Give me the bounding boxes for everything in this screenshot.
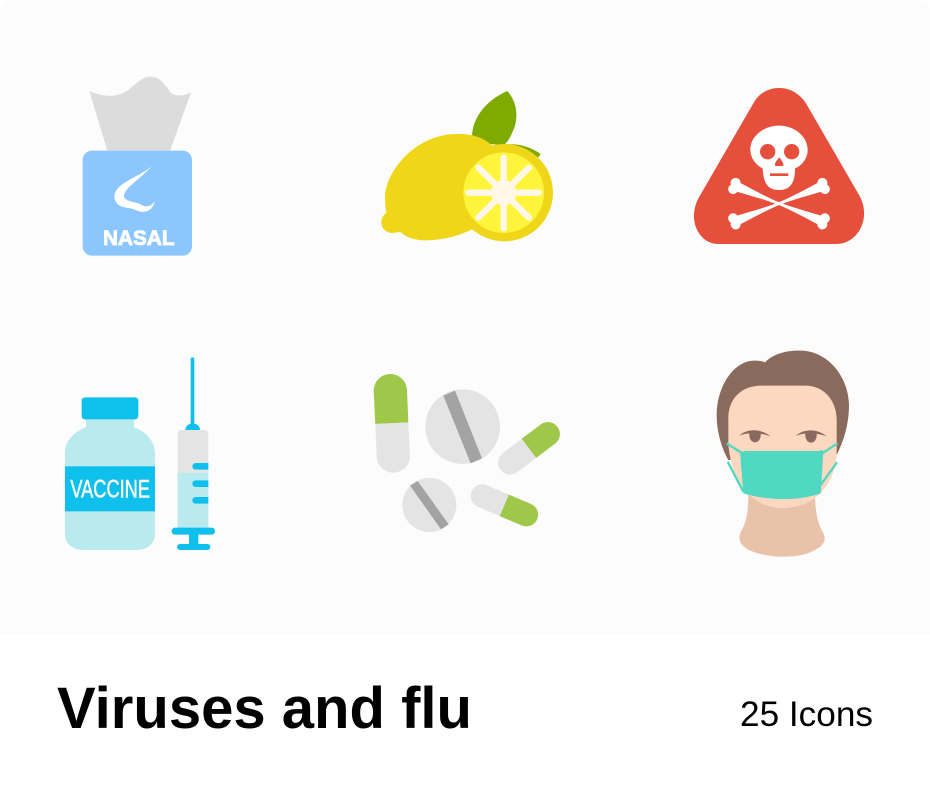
icon: lemon [381,91,553,241]
icon: vaccine vial and syringe [65,357,215,550]
icon count: 25 Icons [740,695,873,734]
icon: skull warning sign [694,88,864,244]
icon: pills and capsules [374,374,565,532]
icon: nasal tissue box [83,77,192,256]
title: Viruses and flu [57,676,472,741]
icon: person wearing mask [717,351,849,557]
icon: vaccine vial and syringe: VACCINE [70,475,150,503]
icon: nasal tissue box: NASAL [103,226,175,250]
